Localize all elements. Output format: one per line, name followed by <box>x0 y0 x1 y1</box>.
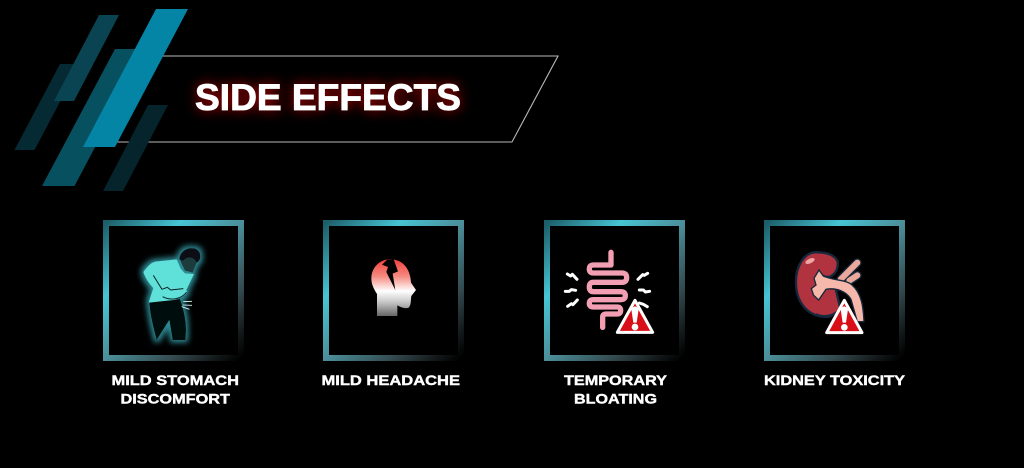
label: DISCOMFORT <box>120 390 231 406</box>
icon frame <box>547 223 682 358</box>
motion marks <box>565 273 650 307</box>
icon: intestine with warning <box>565 252 653 332</box>
card: mild stomach discomfort <box>106 223 241 406</box>
icon frame <box>106 223 241 358</box>
label <box>564 372 668 406</box>
icon frame <box>767 223 902 358</box>
icon: man holding stomach <box>143 248 200 340</box>
label: MILD HEADACHE <box>322 372 460 388</box>
label: MILD STOMACH <box>112 372 239 388</box>
title banner outline <box>115 56 558 142</box>
label: BLOATING <box>574 390 657 406</box>
label: KIDNEY TOXICITY <box>764 372 906 388</box>
kidney body <box>796 252 841 317</box>
warning triangle <box>617 300 653 332</box>
card: mild headache <box>322 223 461 388</box>
icon: kidney with warning <box>796 252 864 333</box>
icon frame <box>326 223 461 358</box>
intestine <box>589 252 627 327</box>
title: SIDE EFFECTS <box>195 77 461 118</box>
pelvis and ureter <box>811 270 864 322</box>
label <box>112 372 239 406</box>
warning triangle <box>827 300 862 333</box>
card: kidney toxicity <box>764 223 906 388</box>
vessels <box>841 263 857 281</box>
icon: head with lightning <box>371 259 416 316</box>
decorative slanted bars <box>14 9 188 191</box>
label: TEMPORARY <box>564 372 668 388</box>
card: temporary bloating <box>547 223 682 406</box>
